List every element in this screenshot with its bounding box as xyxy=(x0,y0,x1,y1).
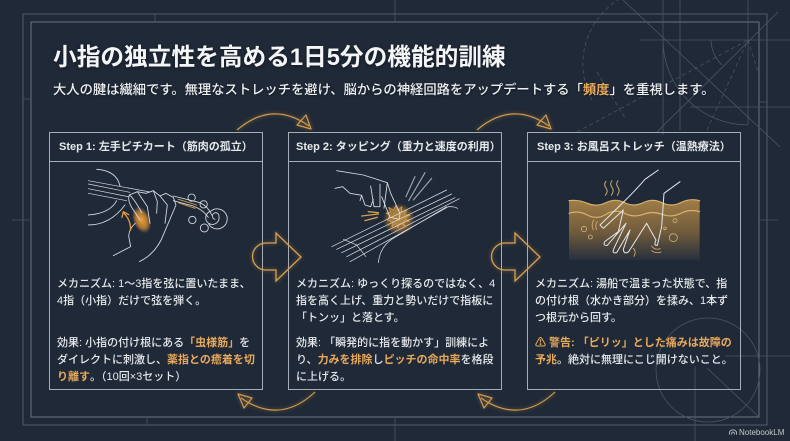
step 1 heading xyxy=(50,133,262,162)
arrow: step 2 to step 3 xyxy=(477,114,551,130)
step 2 effect text: 効果: 「瞬発的に指を動かす」訓練によ xyxy=(296,337,489,349)
panel: step 3 xyxy=(527,132,741,390)
step 1 mechanism text: メカニズム: 1～3指を弦に置いたまま、 xyxy=(57,278,251,290)
icon: tapping finger xyxy=(332,171,459,263)
NotebookLM logo: NotebookLM xyxy=(739,428,784,437)
step 2 mechanism text: 「トンッ」と落とす。 xyxy=(296,312,405,324)
step 1 effect text xyxy=(57,336,255,383)
step 1 mechanism text: 4指（小指）だけで弦を弾く。 xyxy=(57,295,206,307)
icon: hands in bath xyxy=(569,170,700,260)
step 1 heading: Step 1: 左手ピチカート（筋肉の孤立） xyxy=(59,141,253,153)
step 3 warning text: 予兆。絶対に無理にこじ開けないこと。 xyxy=(535,354,733,366)
icon: violin hand xyxy=(88,169,227,262)
step 2 effect text: り、力みを排除しピッチの命中率を格段 xyxy=(296,354,494,366)
step 2 effect text xyxy=(296,336,494,383)
step 3 warning text: ⚠ 警告: 「ピリッ」とした痛みは故障の xyxy=(535,337,732,349)
step 1 effect text: ダイレクトに刺激し、薬指との癒着を切 xyxy=(57,354,255,366)
step 1 mechanism text xyxy=(57,278,251,307)
step 3 warning text xyxy=(535,336,733,366)
step 2 mechanism text: メカニズム: ゆっくり探るのではなく、4 xyxy=(296,278,495,290)
step 3 mechanism text: メカニズム: 湯船で温まった状態で、指 xyxy=(535,278,727,290)
step 2 heading: Step 2: タッピング（重力と速度の利用） xyxy=(296,141,501,153)
step 2 mechanism text xyxy=(296,278,495,324)
title: 小指の独立性を高める1日5分の機能的訓練 xyxy=(53,45,506,71)
panel: step 2 xyxy=(288,132,502,390)
arrow: block arrow 2 xyxy=(491,233,540,281)
arrow: step 3 back to step 2 xyxy=(478,392,555,410)
step 3 heading: Step 3: お風呂ストレッチ（温熱療法） xyxy=(537,141,731,153)
step 3 heading xyxy=(528,133,740,162)
panel: step 1 xyxy=(49,132,263,390)
step 3 mechanism text: つ根元から回す。 xyxy=(535,312,622,324)
arrow: step 1 to step 2 xyxy=(237,114,311,130)
step 3 mechanism text xyxy=(535,278,728,324)
subtitle: 大人の腱は繊細です。無理なストレッチを避け、脳からの神経回路をアップデートする「頻度」を重視します。 xyxy=(53,82,715,97)
step 1 effect text: り離す。（10回×3セット） xyxy=(57,371,186,383)
step 2 mechanism text: 指を高く上げ、重力と勢いだけで指板に xyxy=(296,295,493,307)
step 2 heading xyxy=(289,133,501,162)
step 1 effect text: 効果: 小指の付け根にある「虫様筋」を xyxy=(57,337,250,349)
step 2 effect text: に上げる。 xyxy=(296,371,351,383)
arrow: block arrow 1 xyxy=(252,233,301,281)
step 3 mechanism text: の付け根（水かき部分）を揉み、1本ず xyxy=(535,295,728,307)
arrow: step 2 back to step 1 xyxy=(238,392,315,410)
